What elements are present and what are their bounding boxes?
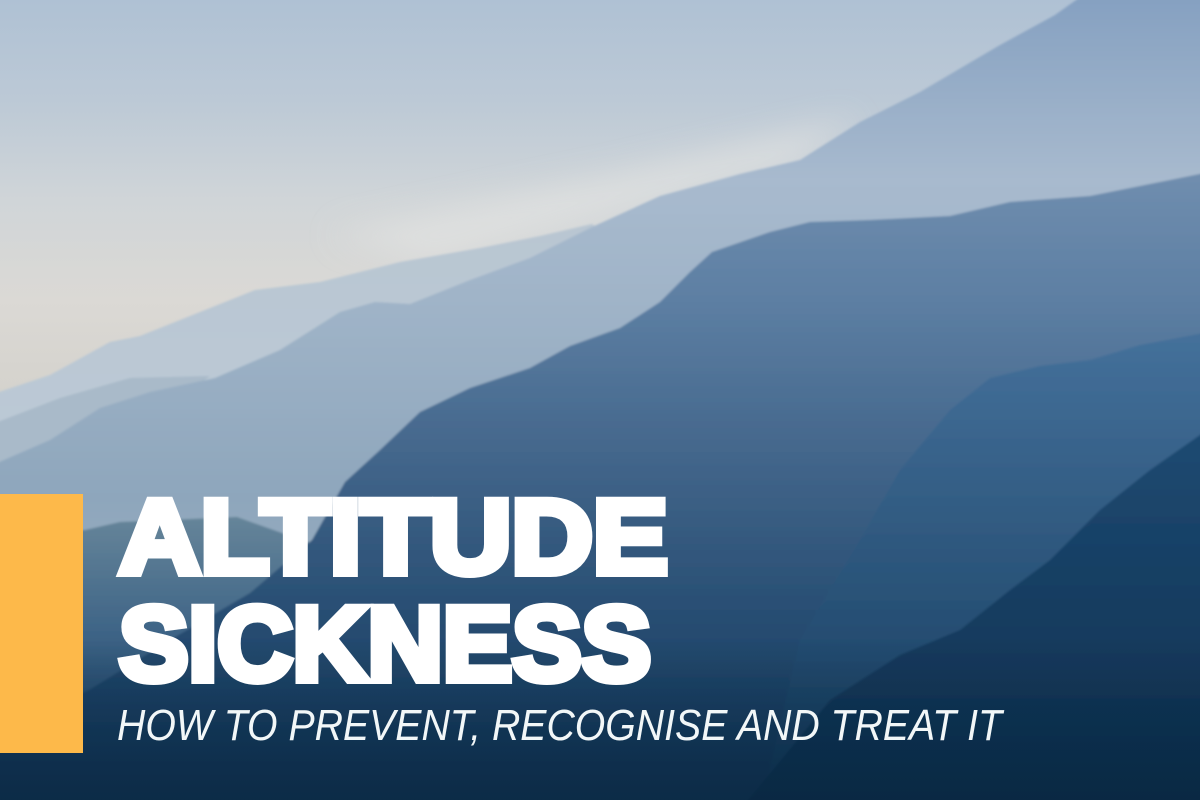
title line: SICKNESS: SICKNESS — [119, 586, 651, 703]
background: haze band — [330, 118, 860, 260]
subtitle: HOW TO PREVENT, RECOGNISE AND TREAT IT — [117, 701, 1005, 750]
title — [119, 479, 668, 703]
title line: ALTITUDE: ALTITUDE — [119, 479, 668, 596]
accent: yellow bar — [0, 494, 83, 753]
background: bottom shading — [0, 640, 1200, 800]
